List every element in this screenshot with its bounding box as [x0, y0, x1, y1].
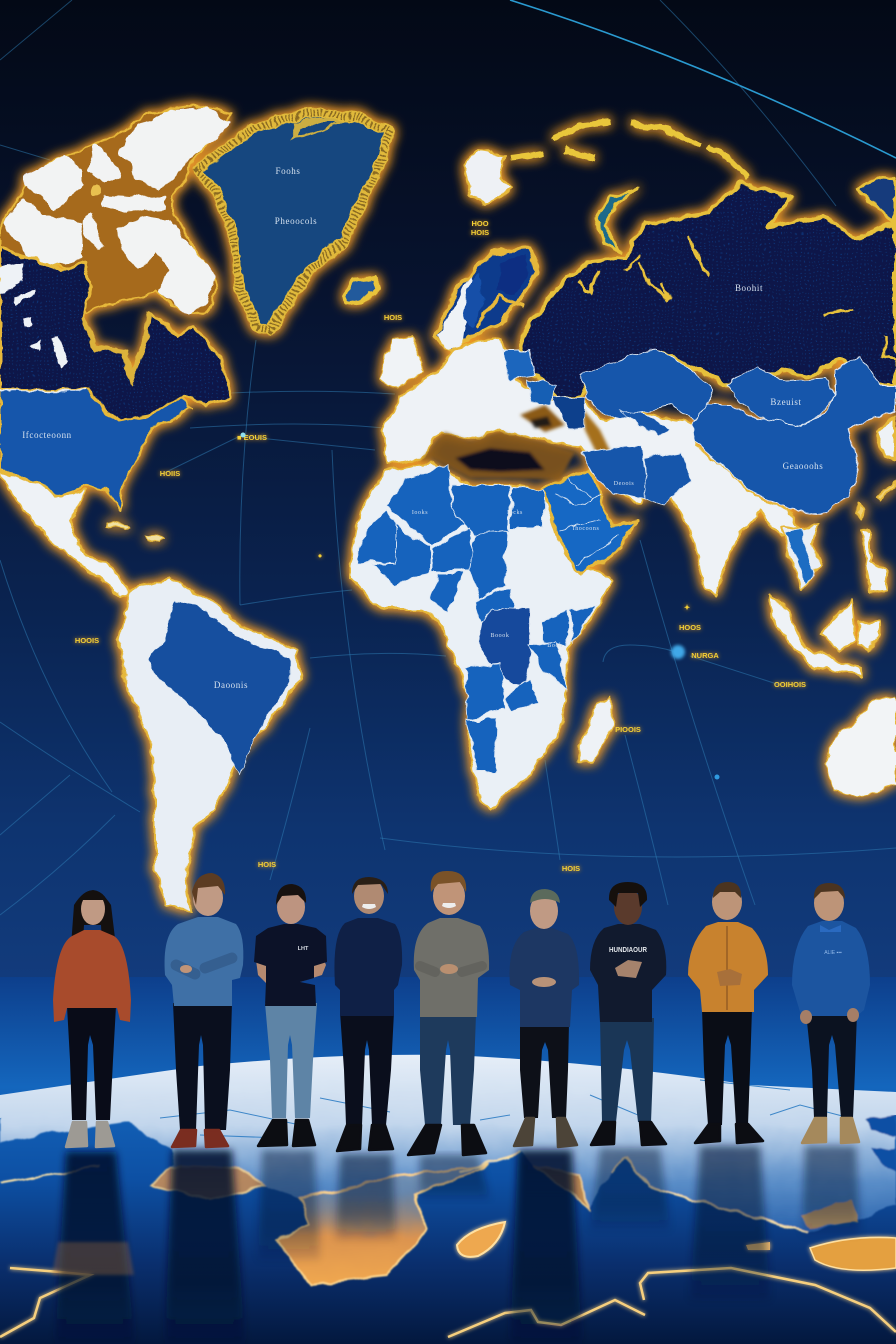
Black Sea region [527, 380, 558, 404]
network arcs [0, 0, 896, 915]
Europe and western Asia [382, 340, 800, 597]
person reflections [52, 1146, 860, 1344]
gold callout labels: HOO [471, 219, 489, 228]
Brazil [148, 600, 290, 776]
Caucasus [552, 396, 586, 430]
gold callout labels: ■ EOUIS [237, 433, 267, 442]
South America [118, 578, 300, 913]
person 5: boy in grey sweater [408, 871, 489, 1155]
gold callout labels: NURGA [691, 651, 719, 660]
Ukraine [502, 350, 535, 380]
Russia coast details [578, 235, 896, 358]
floor island glows [457, 1222, 896, 1270]
China [692, 355, 896, 515]
map country labels: Daoonis [214, 680, 248, 690]
floor Africa glow [277, 1165, 490, 1285]
Kazakhstan [582, 348, 715, 420]
Scandinavia detail [438, 255, 530, 350]
Iran [582, 445, 648, 500]
gold callout labels: HOOS [679, 623, 701, 632]
map country labels: Foohs [275, 166, 301, 176]
Taiwan and Japan streak [857, 482, 896, 520]
background wall [0, 0, 896, 978]
gold callout labels: ● [318, 551, 322, 560]
map country labels: Pheoocols [275, 216, 317, 226]
gold callout labels: HOIS [562, 864, 580, 873]
network hub nodes [240, 432, 720, 780]
floor coast outlines [0, 1268, 896, 1337]
person 7: boy in black sweatshirt: HUNDIAOUR [609, 945, 647, 954]
gold callout labels: HOIS [384, 313, 402, 322]
person 2: boy in blue sweater [165, 873, 243, 1147]
floor West Africa glow [152, 1165, 265, 1200]
Mexico and Central America [0, 472, 132, 596]
floor blue patches [866, 1115, 896, 1172]
person 3: boy in black t-shirt [254, 884, 327, 1146]
Borneo [820, 600, 856, 650]
US Canada border [0, 390, 85, 392]
map country labels: Boohit [735, 283, 763, 293]
Philippines [862, 530, 886, 592]
gold callout labels: HOIS [471, 228, 489, 237]
gold callout labels: HOIS [258, 860, 276, 869]
Mongolia [728, 367, 835, 425]
person 3: boy in black t-shirt: LHT [298, 946, 309, 952]
Madagascar [580, 695, 612, 762]
Far East peninsula [855, 176, 896, 222]
Greenland [197, 112, 390, 330]
map country labels: Ihocoons [573, 526, 599, 532]
gold callout labels: PIOOIS [615, 725, 641, 734]
Australia [826, 695, 896, 795]
map country labels: Booh [547, 643, 563, 649]
Iceland [342, 278, 378, 304]
Central Asia and Eastern Europe countries [502, 348, 835, 582]
Canada [0, 247, 230, 422]
arctic fringe islands [510, 122, 748, 178]
floor map land with ice [0, 1065, 896, 1285]
USA [0, 390, 190, 510]
gold callout labels: OOIHOIS [774, 680, 806, 689]
world map continents [0, 106, 896, 913]
floor [0, 977, 896, 1344]
Sumatra and Java arc [770, 594, 862, 676]
map country labels: Iooks [412, 510, 428, 516]
ice sheet smooth horizon [0, 1055, 896, 1118]
Arabia borders [555, 480, 620, 565]
Greenland fringe detail [197, 112, 390, 330]
gold callout labels: HOOIS [75, 636, 99, 645]
ice rivers [160, 1080, 850, 1138]
Hudson Bay gold shore [84, 312, 150, 378]
Thailand Vietnam [785, 528, 815, 582]
Korea fragment [876, 415, 896, 460]
floor Arabia glow [535, 1166, 588, 1207]
Mediterranean gold shallows [420, 405, 612, 480]
floor coast lines [0, 1153, 808, 1232]
gold callout labels [75, 219, 806, 873]
Sulawesi [858, 620, 880, 650]
Arabia [542, 470, 636, 575]
map country labels: Bzeuist [770, 397, 802, 407]
person 1: woman in rust sweater [53, 890, 131, 1147]
map country labels: Boook [490, 633, 510, 639]
Uzbekistan [618, 410, 670, 438]
gold callout labels: ✦ [684, 603, 691, 612]
map country labels: Iocks [507, 510, 523, 516]
Caribbean islands [108, 522, 165, 544]
map country labels: Ifcocteoonn [22, 430, 72, 440]
person 9: boy in blue fleece: ALIE ▪▪▪ [824, 950, 842, 956]
Africa [350, 462, 613, 808]
map country overlays [0, 112, 896, 776]
map country labels: Geaooohs [783, 461, 823, 471]
gold callout labels: HOIIS [160, 469, 180, 478]
map country labels: Deoois [614, 481, 634, 487]
Canadian arctic islands [0, 106, 232, 315]
United Kingdom [378, 336, 424, 388]
person 9: boy in blue fleece [792, 883, 870, 1143]
Russia [520, 183, 896, 400]
Pakistan [644, 452, 690, 505]
person 6: boy in dark blue sweater and beanie [510, 889, 579, 1147]
Canada ice flecks [0, 262, 68, 368]
Svalbard [464, 150, 510, 204]
person 4: boy in navy sweater [334, 877, 402, 1151]
Novaya Zemlya [595, 190, 636, 252]
map country labels [22, 166, 823, 690]
Scandinavia [435, 248, 536, 352]
person 8: boy in orange sweater [688, 882, 768, 1143]
Africa countries [358, 465, 596, 772]
Southeast Asia [782, 524, 822, 588]
person 7: boy in black sweatshirt [590, 882, 666, 1145]
